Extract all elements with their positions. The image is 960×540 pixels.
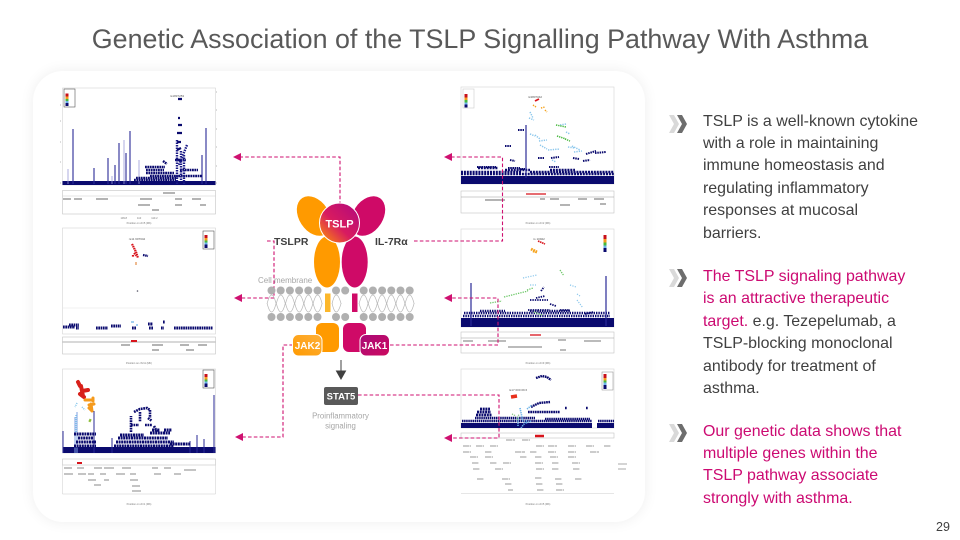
page number: 29 <box>936 520 950 534</box>
plot: bottom right: rs17 000 09 6 <box>509 388 527 392</box>
text block 2: TSLP-blocking monoclonal <box>703 335 893 352</box>
text block 2: asthma. <box>703 380 760 397</box>
arrowheads <box>233 153 452 442</box>
text block 2: antibody for treatment of <box>703 358 876 375</box>
plot: top left: 109.8 110 110.2 <box>120 216 158 220</box>
intracellular domains <box>316 323 366 352</box>
JAK2 <box>292 334 322 356</box>
label: TSLPR: TSLPR <box>274 236 309 248</box>
label: proinflammatory signaling: signaling <box>325 422 356 430</box>
text block 2: target. e.g. Tezepelumab, a <box>703 313 896 330</box>
text block 3: TSLP pathway associate <box>703 467 878 484</box>
text block 3 <box>703 422 902 507</box>
STAT5: STAT5 <box>327 392 356 402</box>
arrow: to STAT5 <box>336 360 346 379</box>
text block 3: multiple genes within the <box>703 445 878 462</box>
text block 2: The TSLP signaling pathway <box>703 268 905 285</box>
transmembrane segments <box>325 294 358 312</box>
plot: middle right <box>461 229 614 365</box>
plot: top left <box>60 88 217 225</box>
plot: middle left: Position on chr11 (Mb) <box>126 361 152 365</box>
plot: top left: Position on chr5 (Mb) <box>127 221 151 225</box>
STAT5 <box>324 387 358 405</box>
title: Genetic Association of the TSLP Signalling Pathway With Asthma <box>92 24 868 54</box>
JAK1 <box>360 334 390 356</box>
text block 2: is an attractive therapeutic <box>703 290 889 307</box>
text block 1: TSLP is a well-known cytokine <box>703 112 918 130</box>
text block 1: responses at mucosal <box>703 202 858 219</box>
receptor: IL-7R alpha <box>342 190 392 288</box>
plot: top right: Position on chr2 (Mb) <box>526 221 550 225</box>
plot: top right: rs3807042 <box>528 95 542 99</box>
bullet icon 1 <box>669 115 687 133</box>
plot: middle right: Position on chr9 (Mb) <box>526 361 550 365</box>
plot: bottom left: Position on chr1 (Mb) <box>127 502 151 506</box>
text block 1: regulating inflammatory <box>703 180 869 197</box>
receptor: TSLPR <box>290 190 340 288</box>
JAK1: JAK1 <box>362 341 388 352</box>
plot: middle left: rs11 607642 <box>129 237 146 241</box>
text block 1: barriers. <box>703 225 761 242</box>
bullet icon 2 <box>669 269 687 287</box>
text block 1: immune homeostasis and <box>703 157 885 174</box>
panel: diagram and plots <box>33 71 645 522</box>
plot: top left: rs1837253 <box>170 94 184 98</box>
ligand: TSLP <box>320 203 360 243</box>
plot: bottom right <box>461 369 627 506</box>
label: cell membrane: Cell membrane <box>258 276 313 285</box>
pathway diagram <box>258 190 414 430</box>
JAK2: JAK2 <box>295 341 321 352</box>
ligand: TSLP: TSLP <box>325 218 354 230</box>
membrane <box>267 286 414 321</box>
text block 3: strongly with asthma. <box>703 490 853 507</box>
text block 2 <box>703 268 906 397</box>
plot: bottom right: Position on chr5 (Mb) <box>526 502 550 506</box>
plot: top right <box>461 87 614 225</box>
plot: middle left <box>62 228 216 365</box>
label: proinflammatory signaling: Proinflammatory <box>312 412 369 420</box>
bullet icon 3 <box>669 424 687 442</box>
text block 3: Our genetic data shows that <box>703 422 901 440</box>
label: IL-7R alpha: IL-7Rα <box>375 236 408 248</box>
connector lines <box>240 157 502 438</box>
plot: bottom left <box>62 369 216 506</box>
text block 1 <box>703 112 918 242</box>
plot: middle right: rs 10922 <box>533 237 545 241</box>
text block 1: with a role in maintaining <box>703 135 878 152</box>
